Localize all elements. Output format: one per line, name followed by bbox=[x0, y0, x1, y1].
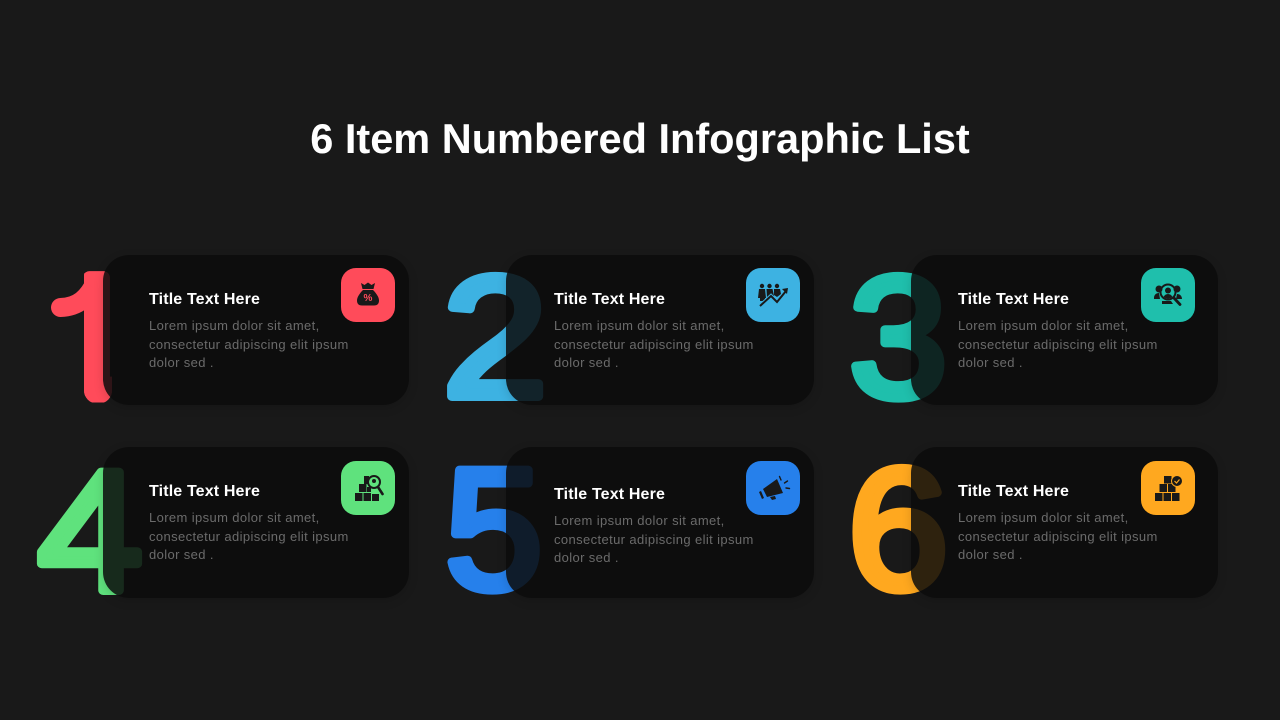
panel: item 5 bbox=[445, 433, 814, 625]
card 1 title: Title Text Here bbox=[149, 291, 260, 308]
icon: boxes inspection bbox=[341, 461, 395, 515]
card 4 text: consectetur adipiscing elit ipsum bbox=[149, 529, 349, 544]
card 2 text: dolor sed . bbox=[554, 355, 619, 370]
card 3 title: Title Text Here bbox=[958, 291, 1069, 308]
card 6 text: consectetur adipiscing elit ipsum bbox=[958, 529, 1158, 544]
panel: item 3 bbox=[849, 241, 1218, 433]
number 5: 5 bbox=[445, 433, 543, 625]
card 4 text bbox=[149, 510, 349, 562]
card 3 text: consectetur adipiscing elit ipsum bbox=[958, 337, 1158, 352]
card 6 text bbox=[958, 510, 1158, 562]
card 5 text: dolor sed . bbox=[554, 550, 619, 565]
icon: people search bbox=[1141, 268, 1195, 322]
icon: boxes approved bbox=[1141, 461, 1195, 515]
icon: team growth bbox=[746, 268, 800, 322]
panel: item 4 bbox=[36, 435, 409, 628]
card 5 text: Lorem ipsum dolor sit amet, bbox=[554, 513, 725, 528]
card 1 bbox=[103, 255, 409, 405]
number 1 bbox=[51, 271, 112, 402]
card 5 text: consectetur adipiscing elit ipsum bbox=[554, 532, 754, 547]
icon: megaphone bbox=[746, 461, 800, 515]
panel: item 2 bbox=[442, 241, 814, 434]
number 1: 1 bbox=[45, 241, 141, 433]
card 1 text: Lorem ipsum dolor sit amet, bbox=[149, 318, 320, 333]
card 1 text bbox=[149, 318, 349, 370]
card 2 title: Title Text Here bbox=[554, 291, 665, 308]
panel: item 1 bbox=[51, 255, 409, 405]
panel: item 6 bbox=[848, 433, 1218, 626]
card 1 text: consectetur adipiscing elit ipsum bbox=[149, 337, 349, 352]
card 3 text: Lorem ipsum dolor sit amet, bbox=[958, 318, 1129, 333]
card 2 text: Lorem ipsum dolor sit amet, bbox=[554, 318, 725, 333]
card 4 text: dolor sed . bbox=[149, 547, 214, 562]
card 3 bbox=[911, 255, 1218, 405]
icon: money bag bbox=[341, 268, 395, 322]
card 5 title: Title Text Here bbox=[554, 486, 665, 503]
title: 6 Item Numbered Infographic List bbox=[310, 115, 970, 162]
card 4 bbox=[103, 447, 409, 598]
card 3 text bbox=[958, 318, 1158, 370]
number 4: 4 bbox=[38, 435, 143, 628]
card 2 text bbox=[554, 318, 754, 370]
card 6 bbox=[911, 447, 1218, 598]
card 5 text bbox=[554, 513, 754, 565]
card 1 text: dolor sed . bbox=[149, 355, 214, 370]
card 4 title: Title Text Here bbox=[149, 483, 260, 500]
number 2: 2 bbox=[442, 241, 548, 434]
card 6 text: Lorem ipsum dolor sit amet, bbox=[958, 510, 1129, 525]
icon: money bag: % bbox=[364, 293, 373, 304]
card 3 text: dolor sed . bbox=[958, 355, 1023, 370]
number 6: 6 bbox=[848, 433, 948, 626]
card 2 text: consectetur adipiscing elit ipsum bbox=[554, 337, 754, 352]
number 3: 3 bbox=[849, 241, 948, 433]
card 2 bbox=[506, 255, 814, 405]
card 6 text: dolor sed . bbox=[958, 547, 1023, 562]
card 4 text: Lorem ipsum dolor sit amet, bbox=[149, 510, 320, 525]
card 5 bbox=[506, 447, 814, 598]
card 6 title: Title Text Here bbox=[958, 483, 1069, 500]
